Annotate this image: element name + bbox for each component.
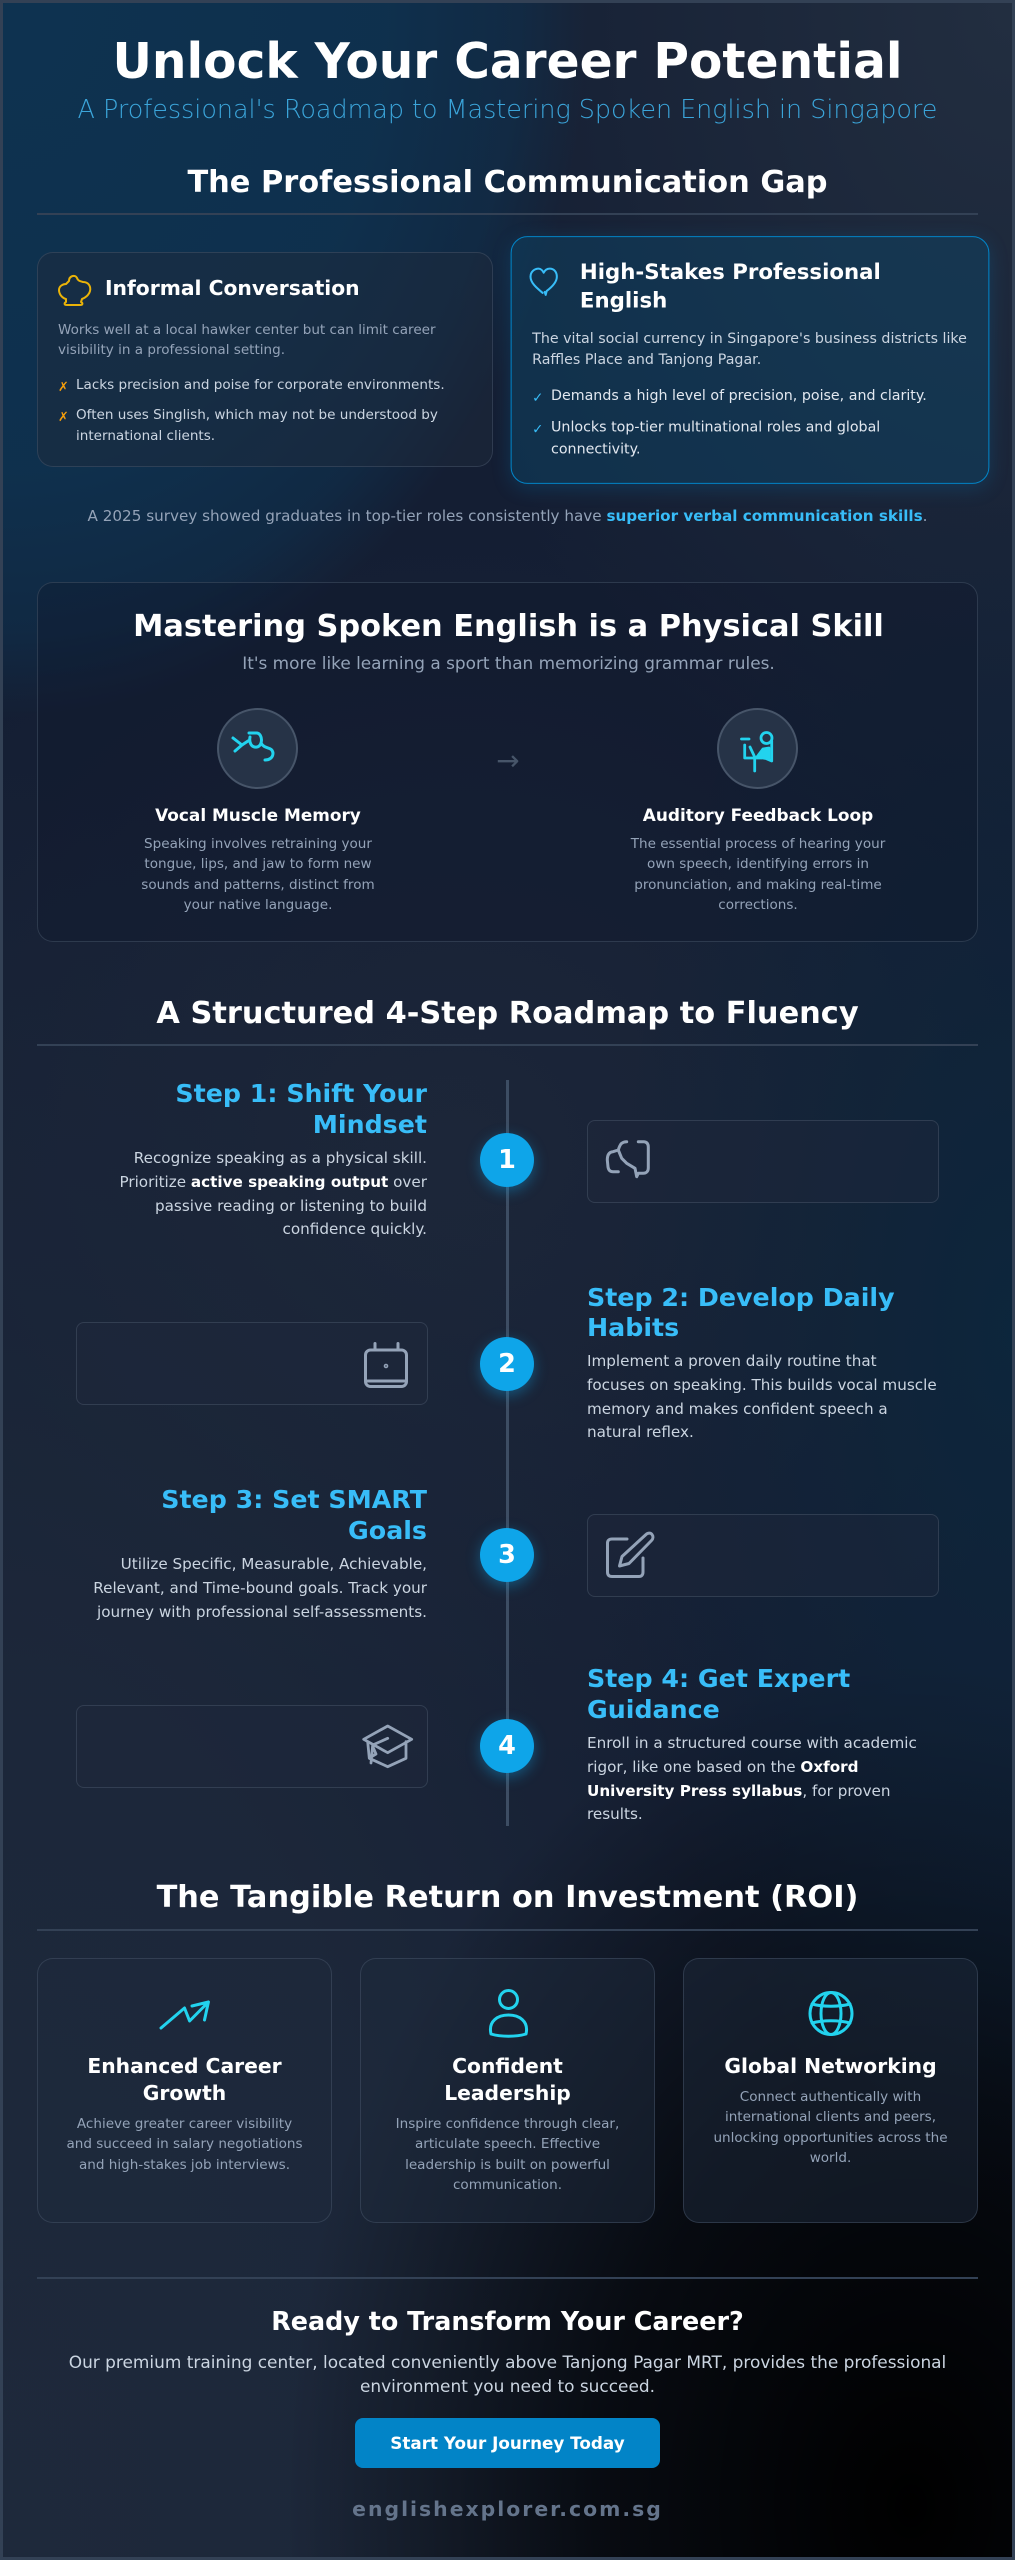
step 3 text: journey with professional self-assessments. bbox=[97, 1603, 427, 1621]
card description: The vital social currency in Singapore's business districts like bbox=[532, 330, 967, 347]
icon: graduation cap bbox=[362, 1724, 414, 1768]
step 4 number: 4 bbox=[498, 1731, 516, 1761]
column text bbox=[630, 836, 886, 913]
panel: career growth bbox=[37, 1958, 332, 2223]
column text: The essential process of hearing your bbox=[631, 836, 885, 852]
step 3 heading bbox=[161, 1485, 427, 1545]
step 4 heading: Step 4: Get Expert bbox=[587, 1664, 850, 1693]
icon: globe bbox=[808, 1991, 854, 2036]
column heading: Vocal Muscle Memory bbox=[155, 805, 361, 825]
roadmap timeline bbox=[76, 1079, 939, 1826]
step 3 number bbox=[480, 1528, 534, 1582]
panel: leadership bbox=[360, 1958, 655, 2223]
step 2 text: natural reflex. bbox=[587, 1423, 694, 1441]
bullet two: connectivity. bbox=[551, 441, 641, 458]
bullet two: Often uses Singlish, which may not be understood by bbox=[76, 407, 438, 423]
bullet two: Unlocks top-tier multinational roles and global bbox=[551, 418, 880, 435]
step 4 icon box bbox=[76, 1705, 428, 1788]
column text: your native language. bbox=[184, 897, 332, 913]
step 4 heading bbox=[587, 1664, 850, 1724]
bullet one: ✓ bbox=[532, 390, 543, 406]
card heading: Growth bbox=[143, 2081, 226, 2105]
cta button: Start Your Journey Today bbox=[390, 2433, 625, 2453]
icon: trending up bbox=[159, 2000, 210, 2030]
step 4 text bbox=[587, 1734, 917, 1823]
icon: auditory circle bbox=[717, 708, 798, 789]
header bbox=[78, 34, 937, 124]
column heading: Auditory Feedback Loop bbox=[643, 805, 873, 825]
step 2 heading: Step 2: Develop Daily bbox=[587, 1282, 895, 1312]
step 3 icon box bbox=[587, 1514, 939, 1597]
panel heading: Mastering Spoken English is a Physical Skill bbox=[133, 609, 884, 644]
title: Unlock Your Career Potential bbox=[112, 34, 903, 90]
card text: and high-stakes job interviews. bbox=[79, 2157, 290, 2173]
column text: own speech, identifying errors in bbox=[647, 856, 869, 872]
icon: informal chat outline bbox=[58, 274, 92, 306]
card description bbox=[58, 322, 436, 358]
step 1 text bbox=[119, 1149, 427, 1238]
icon: vocal circle bbox=[217, 708, 298, 789]
step 3 number: 3 bbox=[498, 1540, 516, 1570]
card text: and succeed in salary negotiations bbox=[66, 2136, 303, 2152]
bullet two: ✗ bbox=[58, 410, 69, 425]
card heading: Confident bbox=[452, 2054, 563, 2078]
step 2 icon box bbox=[76, 1322, 428, 1405]
column text: corrections. bbox=[718, 897, 798, 913]
card heading: Informal Conversation bbox=[105, 276, 360, 300]
step 3 heading: Goals bbox=[348, 1516, 427, 1545]
step 2 text: memory and makes confident speech a bbox=[587, 1400, 888, 1418]
card text: Inspire confidence through clear, bbox=[396, 2116, 619, 2132]
card description: visibility in a professional setting. bbox=[58, 342, 285, 358]
step 4 number bbox=[480, 1719, 534, 1773]
subtitle: A Professional's Roadmap to Mastering Spoken English in Singapore bbox=[78, 94, 937, 124]
step 1 text: Recognize speaking as a physical skill. bbox=[134, 1149, 427, 1167]
step 2 bbox=[76, 1282, 937, 1441]
step 1 heading: Step 1: Shift Your bbox=[175, 1079, 427, 1108]
bullet one: Demands a high level of precision, poise, and clarity. bbox=[551, 387, 927, 404]
card text: international clients and peers, bbox=[725, 2109, 936, 2125]
icon: heart outline bbox=[530, 268, 558, 296]
column text bbox=[141, 836, 375, 913]
card text: Connect authentically with bbox=[740, 2089, 921, 2105]
step 3 heading: Step 3: Set SMART bbox=[161, 1485, 427, 1514]
step 2 number bbox=[480, 1336, 534, 1390]
step 3 text: Relevant, and Time-bound goals. Track your bbox=[93, 1579, 427, 1597]
arrow: → bbox=[496, 744, 520, 777]
card heading: Leadership bbox=[444, 2081, 571, 2105]
panel: informal conversation bbox=[37, 252, 493, 467]
panel: high-stakes professional english bbox=[511, 236, 989, 483]
step 3 text bbox=[93, 1555, 427, 1621]
card text: Achieve greater career visibility bbox=[77, 2116, 292, 2132]
card text: leadership is built on powerful bbox=[405, 2157, 610, 2173]
card text bbox=[66, 2116, 303, 2173]
cta button bbox=[355, 2418, 660, 2468]
card heading bbox=[444, 2054, 571, 2105]
column: vocal muscle memory bbox=[141, 708, 375, 913]
step 1 text: Prioritize active speaking output over bbox=[119, 1173, 427, 1191]
step 2 text bbox=[587, 1352, 937, 1441]
step 1 number: 1 bbox=[498, 1145, 516, 1175]
card description: Raffles Place and Tanjong Pagar. bbox=[532, 352, 761, 368]
card heading: High-Stakes Professional bbox=[580, 259, 881, 284]
column text: sounds and patterns, distinct from bbox=[141, 877, 375, 893]
panel: global networking bbox=[683, 1958, 978, 2223]
bullet two bbox=[532, 418, 880, 458]
card heading: Global Networking bbox=[724, 2054, 937, 2078]
card text: communication. bbox=[453, 2177, 562, 2193]
step 1 text: passive reading or listening to build bbox=[155, 1197, 427, 1215]
icon: calendar bbox=[364, 1342, 408, 1388]
bullet two: ✓ bbox=[532, 421, 543, 437]
panel: physical skill bbox=[37, 582, 978, 942]
card text bbox=[396, 2116, 619, 2193]
step 4 text: results. bbox=[587, 1805, 643, 1823]
survey note: A 2025 survey showed graduates in top-tier roles consistently have superior verbal communication skills. bbox=[88, 507, 927, 525]
column text: tongue, lips, and jaw to form new bbox=[144, 856, 372, 872]
step 4 text: Enroll in a structured course with academic bbox=[587, 1734, 917, 1752]
step 3 bbox=[93, 1485, 939, 1621]
cta heading: Ready to Transform Your Career? bbox=[271, 2306, 744, 2336]
cta text bbox=[0, 2350, 1015, 2398]
website: englishexplorer.com.sg bbox=[352, 2497, 663, 2521]
step 1 heading: Mindset bbox=[313, 1110, 427, 1139]
step 2 text: Implement a proven daily routine that bbox=[587, 1352, 877, 1370]
step 2 heading bbox=[587, 1282, 895, 1342]
icon: chat bubbles bbox=[606, 1140, 650, 1178]
step 3 text: Utilize Specific, Measurable, Achievable, bbox=[121, 1555, 427, 1573]
step 1 bbox=[119, 1079, 939, 1238]
card text bbox=[713, 2089, 948, 2166]
bullet two: international clients. bbox=[76, 428, 215, 444]
column text: Speaking involves retraining your bbox=[144, 836, 372, 852]
step 2 heading: Habits bbox=[587, 1313, 679, 1342]
step 4 bbox=[76, 1664, 917, 1823]
card description: Works well at a local hawker center but can limit career bbox=[58, 322, 436, 338]
panel subheading: It's more like learning a sport than memorizing grammar rules. bbox=[242, 653, 775, 673]
step 1 text: confidence quickly. bbox=[283, 1220, 427, 1238]
icon: person bbox=[488, 1989, 528, 2038]
card heading bbox=[87, 2054, 282, 2105]
icon: pencil edit bbox=[606, 1532, 654, 1578]
heading: roi: The Tangible Return on Investment (ROI) bbox=[157, 1880, 858, 1915]
card text: unlocking opportunities across the bbox=[713, 2130, 948, 2146]
card description bbox=[532, 330, 967, 368]
step 1 heading bbox=[175, 1079, 427, 1139]
bullet one: ✗ bbox=[58, 380, 69, 395]
cta text: Our premium training center, located conveniently above Tanjong Pagar MRT, provides the professional bbox=[69, 2352, 946, 2372]
step 1 number bbox=[480, 1133, 534, 1187]
step 4 text: University Press syllabus, for proven bbox=[587, 1782, 891, 1800]
card text: articulate speech. Effective bbox=[415, 2136, 600, 2152]
timeline line bbox=[506, 1080, 508, 1826]
step 4 text: rigor, like one based on the Oxford bbox=[587, 1758, 859, 1776]
heading: communication gap: The Professional Communication Gap bbox=[187, 165, 828, 200]
column text: pronunciation, and making real-time bbox=[634, 877, 882, 893]
bullet one: Lacks precision and poise for corporate environments. bbox=[76, 377, 445, 393]
card heading: Enhanced Career bbox=[87, 2054, 282, 2078]
step 4 heading: Guidance bbox=[587, 1695, 720, 1724]
call to action bbox=[0, 2300, 1015, 2530]
step 1 icon box bbox=[587, 1120, 939, 1203]
heading: roadmap: A Structured 4-Step Roadmap to Fluency bbox=[156, 996, 859, 1031]
cta text: environment you need to succeed. bbox=[360, 2376, 655, 2396]
step 2 number: 2 bbox=[498, 1348, 516, 1378]
card heading: English bbox=[580, 287, 667, 313]
card text: world. bbox=[810, 2150, 851, 2166]
card heading bbox=[580, 259, 881, 313]
step 2 text: focuses on speaking. This builds vocal muscle bbox=[587, 1376, 937, 1394]
column: auditory feedback loop bbox=[630, 708, 886, 913]
bullet two bbox=[58, 407, 438, 444]
